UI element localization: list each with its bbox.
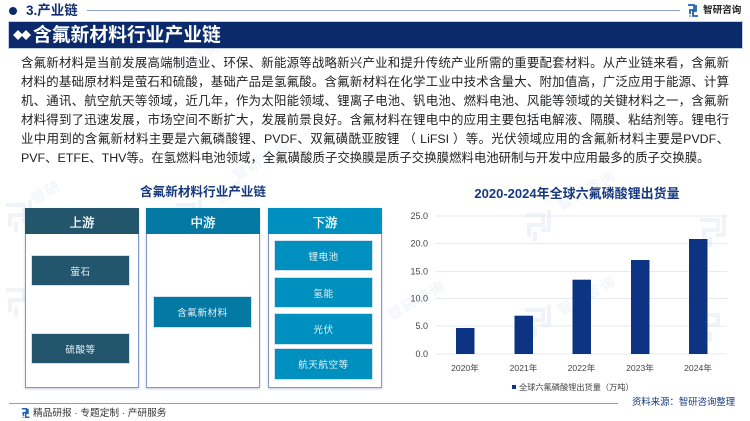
- x axis labels: 2020年: [451, 362, 479, 373]
- source note: 资料来源：智研咨询整理: [632, 396, 735, 407]
- box: sulfuric acid: 硫酸等: [65, 344, 96, 356]
- y axis labels: 25.0: [410, 211, 428, 221]
- upstream header: [25, 208, 139, 234]
- bars: [456, 239, 708, 354]
- text: 智研: [28, 177, 64, 207]
- box: aerospace: 航天航空等: [298, 360, 349, 371]
- intro paragraph: PVF、ETFE、THV等。在氢燃料电池领域，全氟磺酸质子交换膜是质子交换膜燃料电池研制与开发中应用最多的质子交换膜。: [21, 150, 710, 164]
- panel: upstream: [24, 208, 140, 390]
- box: fluorite: 萤石: [70, 266, 91, 278]
- bar chart: [410, 211, 727, 392]
- box: lithium battery: 锂电池: [308, 252, 339, 262]
- upstream header: 上游: [69, 216, 94, 230]
- logo: 智研咨询: 智研咨询: [703, 5, 741, 16]
- x axis labels: 2021年: [510, 362, 538, 373]
- box: fluorite: [32, 256, 129, 285]
- box: aerospace: [275, 349, 372, 379]
- chart title: 2020-2024年全球六氟磷酸锂出货量: [474, 186, 680, 200]
- intro paragraph: 机、通讯、航空航天等领域，近几年，作为太阳能领域、锂离子电池、钒电池、燃料电池、风能等领域的关键材料之一，含氟新: [21, 94, 729, 108]
- y axis labels: 0.0: [415, 349, 428, 359]
- section heading: 3.产业链: 3.产业链: [26, 3, 78, 18]
- x axis labels: 2022年: [568, 362, 596, 373]
- industry chain title: 含氟新材料行业产业链: [140, 184, 266, 198]
- text: 智研咨询: [555, 167, 619, 213]
- box: fluorine materials: [154, 297, 251, 327]
- panel: downstream: [267, 208, 383, 390]
- box: photovoltaic: [275, 314, 372, 344]
- intro paragraph: [21, 56, 729, 164]
- legend: 全球六氟磷酸锂出货量（万吨）: [519, 382, 634, 392]
- box: fluorine materials: 含氟新材料: [177, 308, 228, 319]
- text: 智研咨询: [520, 82, 584, 128]
- x axis labels: [451, 362, 712, 373]
- intro paragraph: 含氟新材料是当前发展高端制造业、环保、新能源等战略新兴产业和提升传统产业所需的重要配套材料。从产业链来看，含氟新: [21, 56, 729, 70]
- title banner: [9, 22, 742, 48]
- text: 智研咨询: [160, 37, 224, 83]
- text: 智研咨询: [230, 137, 294, 183]
- title: 含氟新材料行业产业链: [33, 24, 221, 45]
- text: 智研: [213, 177, 249, 207]
- y axis labels: [410, 211, 428, 359]
- intro paragraph: 材料得到了迅速发展，市场空间不断扩大，发展前景良好。含氟材料在锂电中的应用主要包括电解液、隔膜、粘结剂等。锂电行: [21, 112, 729, 126]
- panel: midstream: [145, 208, 261, 390]
- x axis labels: 2023年: [626, 362, 654, 373]
- y axis labels: 20.0: [410, 238, 428, 248]
- intro paragraph: 材料的基础原材料是萤石和硫酸，基础产品是氢氟酸。含氟新材料在化学工业中技术含量大、附加值高，广泛应用于能源、计算: [21, 75, 729, 89]
- y axis labels: 5.0: [415, 321, 428, 331]
- y axis labels: 10.0: [410, 294, 428, 304]
- icon: diamonds: [13, 30, 31, 40]
- intro paragraph: 业中用到的含氟新材料主要是六氟磷酸锂、PVDF、双氟磺酰亚胺锂 （ LiFSI ）等。光伏领域应用的含氟新材料主要是PVDF、: [21, 132, 729, 146]
- x axis labels: 2024年: [684, 362, 712, 373]
- midstream header: 中游: [190, 216, 216, 230]
- box: hydrogen: [275, 278, 372, 307]
- downstream header: [268, 208, 382, 234]
- y axis labels: 15.0: [410, 266, 428, 276]
- footer slogan: 精品研报 · 专题定制 · 产研服务: [33, 408, 166, 419]
- downstream header: 下游: [312, 216, 338, 230]
- midstream header: [146, 208, 260, 234]
- text: 智研咨询: [385, 277, 449, 323]
- box: hydrogen: 氢能: [313, 288, 334, 300]
- box: sulfuric acid: [32, 334, 129, 363]
- logo: 智研咨询: [688, 4, 741, 17]
- box: photovoltaic: 光伏: [313, 325, 334, 336]
- text: 智研咨询: [555, 272, 619, 318]
- box: lithium battery: [275, 241, 372, 270]
